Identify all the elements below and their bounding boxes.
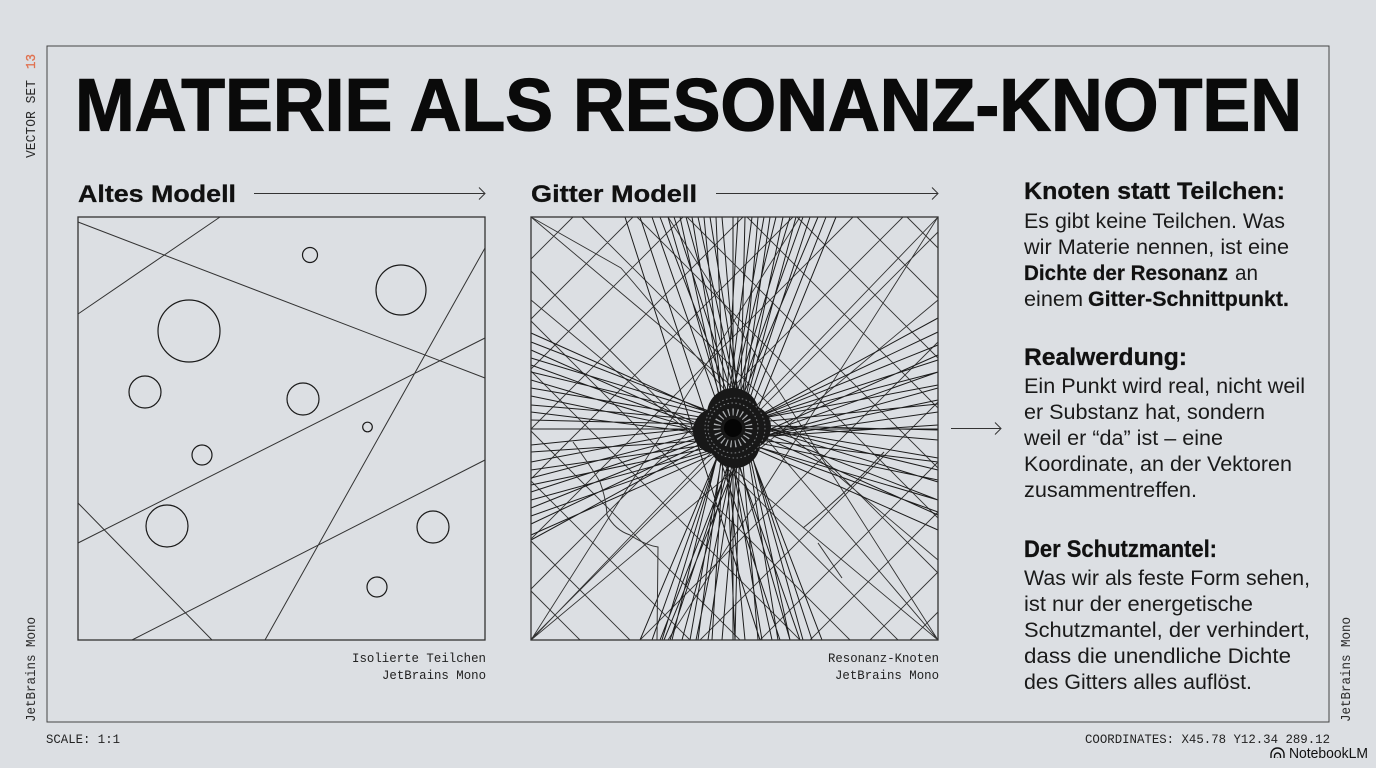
caption: old model: Isolierte Teilchen <box>352 651 486 666</box>
arrow: to explanation <box>951 422 1001 434</box>
caption: old model <box>352 651 486 683</box>
text block: knots: Gitter-Schnittpunkt. <box>1088 287 1289 311</box>
text block: protective coat: des Gitters alles auflöst. <box>1024 670 1252 694</box>
isolated straight lines <box>78 217 485 640</box>
side label: vector set: VECTOR SET <box>24 80 40 158</box>
resonance knot <box>693 388 771 468</box>
footer: coordinates: COORDINATES: X45.78 Y12.34 289.12 <box>1085 732 1330 747</box>
text block: realization: Koordinate, an der Vektoren <box>1024 452 1292 476</box>
text block: knots: Knoten statt Teilchen: <box>1024 178 1285 205</box>
text block: knots: wir Materie nennen, ist eine <box>1023 235 1289 259</box>
diagonal lattice <box>531 217 938 640</box>
isolated particles <box>129 248 449 597</box>
text block: protective coat: Der Schutzmantel: <box>1024 536 1217 563</box>
arrow: old model <box>254 188 485 200</box>
panel: old model diagram <box>78 217 485 640</box>
heading: old model: Altes Modell <box>78 181 236 208</box>
text block: protective coat: ist nur der energetische <box>1024 592 1253 616</box>
caption: grid model: JetBrains Mono <box>835 668 939 683</box>
text block: protective coat: Schutzmantel, der verhindert, <box>1024 618 1310 642</box>
arrow: grid model <box>716 188 938 200</box>
panel: grid model diagram <box>531 217 938 640</box>
footer: scale: SCALE: 1:1 <box>46 732 120 747</box>
side label: font left: JetBrains Mono <box>24 617 40 722</box>
panel border <box>531 217 938 640</box>
caption: old model: JetBrains Mono <box>382 668 486 683</box>
side label: font right: JetBrains Mono <box>1339 617 1355 722</box>
text block: realization: er Substanz hat, sondern <box>1024 400 1265 424</box>
title: MATERIE ALS RESONANZ-KNOTEN <box>75 64 1302 146</box>
side label: vector set: 13 <box>24 54 40 69</box>
curved trace <box>573 442 884 640</box>
text block: protective coat: Was wir als feste Form sehen, <box>1024 566 1310 590</box>
text block: realization: zusammentreffen. <box>1024 478 1197 502</box>
text block: protective coat: dass die unendliche Dichte <box>1024 644 1291 668</box>
brand: NotebookLM: NotebookLM <box>1289 746 1368 762</box>
text block: realization: weil er “da” ist – eine <box>1023 426 1223 450</box>
caption: grid model: Resonanz-Knoten <box>828 651 939 666</box>
radial bundles horizontal <box>531 318 938 540</box>
text block: protective coat <box>1024 536 1310 694</box>
radial bundles vertical <box>625 217 836 640</box>
text block: realization: Realwerdung: <box>1024 344 1187 371</box>
text block: knots: Es gibt keine Teilchen. Was <box>1024 209 1285 233</box>
icon: NotebookLM logo <box>1271 748 1284 758</box>
text block: knots <box>1023 178 1289 311</box>
text block: realization <box>1023 344 1305 502</box>
text block: knots: einem <box>1024 287 1083 311</box>
text block: knots: Dichte der Resonanz <box>1024 261 1228 285</box>
text block: realization: Ein Punkt wird real, nicht weil <box>1024 374 1305 398</box>
heading: grid model: Gitter Modell <box>531 181 697 208</box>
text block: knots: an <box>1235 261 1258 285</box>
caption: grid model <box>828 651 939 683</box>
